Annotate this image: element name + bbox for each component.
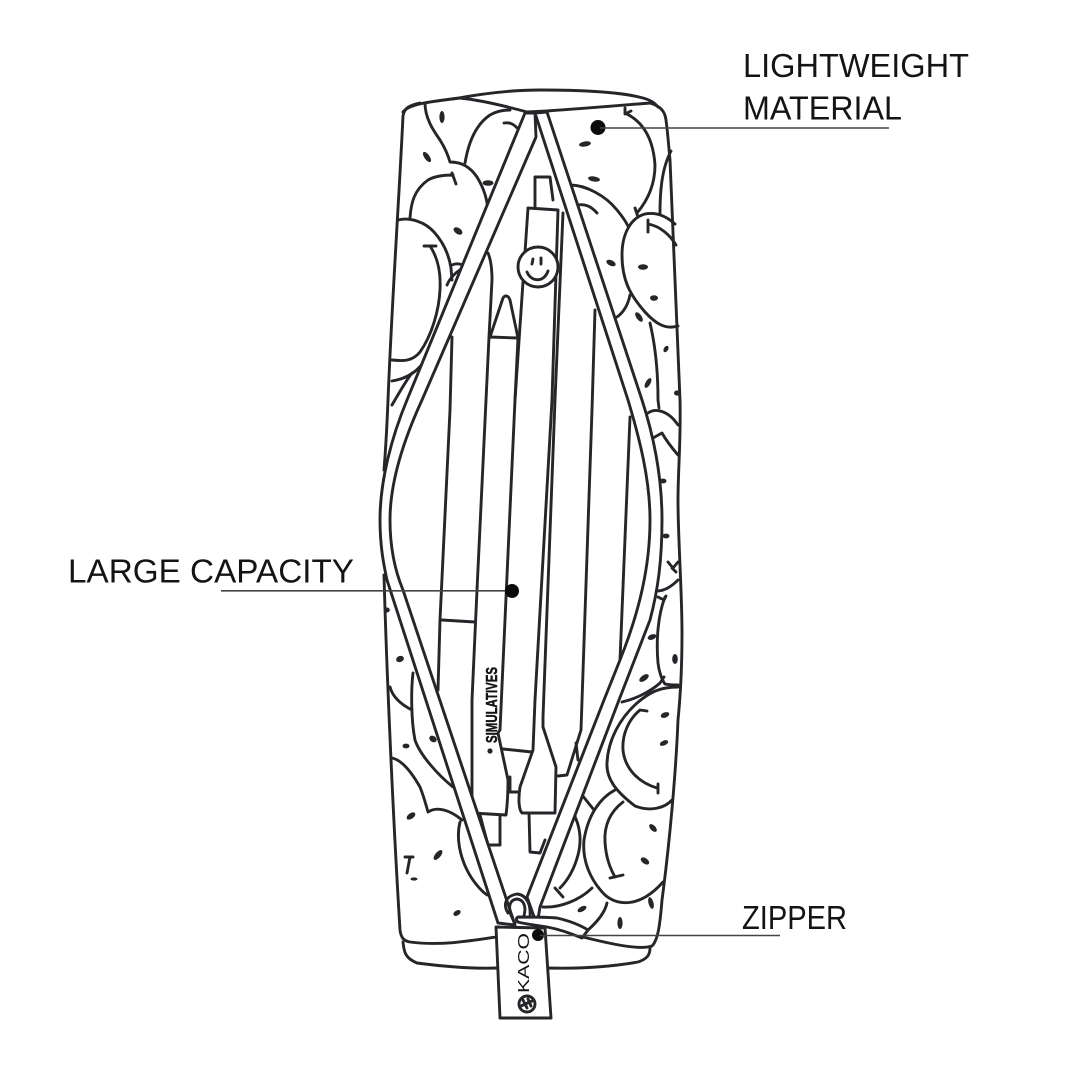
balloons on upper right — [625, 108, 655, 217]
label: LIGHTWEIGHT — [743, 48, 969, 85]
tag wordmark: KACO — [516, 933, 533, 993]
marker dot — [505, 584, 519, 598]
balloons on upper left — [425, 103, 488, 214]
label second line: MATERIAL — [743, 90, 902, 128]
balloons on right side — [648, 411, 678, 455]
balloons on lower left — [390, 673, 453, 787]
crayon stub — [480, 815, 500, 845]
pull ring — [505, 894, 530, 923]
marker dot — [532, 929, 544, 941]
label: LARGE CAPACITY — [68, 554, 354, 591]
zipper band right — [527, 112, 662, 925]
slider — [516, 917, 588, 938]
clip pen stub — [529, 813, 545, 853]
pencil case body outline — [384, 90, 682, 968]
marker dot — [590, 120, 606, 135]
callout: lightweight material — [590, 48, 969, 135]
crayon with tip — [472, 253, 518, 815]
label: ZIPPER — [742, 900, 847, 937]
clip pen — [515, 177, 563, 813]
zipper opening interior — [390, 137, 650, 925]
zipper band left — [380, 113, 536, 925]
back pencil on left — [438, 337, 475, 690]
hang tag — [496, 927, 551, 1018]
smiley clip — [518, 247, 558, 287]
leader line — [221, 590, 512, 592]
leader line — [540, 934, 780, 936]
tag logo — [519, 996, 535, 1012]
leader line — [600, 127, 889, 129]
zipper pull — [496, 894, 588, 1018]
pens inside the case — [438, 177, 630, 853]
callout: large capacity — [68, 554, 519, 598]
fabric pattern: smiley balloons and seeds — [384, 103, 680, 930]
seeds — [384, 111, 680, 929]
back pens on right — [558, 310, 630, 776]
brand text on crayon: SIMULATIVES — [484, 667, 501, 743]
callout: zipper — [532, 900, 847, 941]
brand dot — [487, 748, 493, 754]
